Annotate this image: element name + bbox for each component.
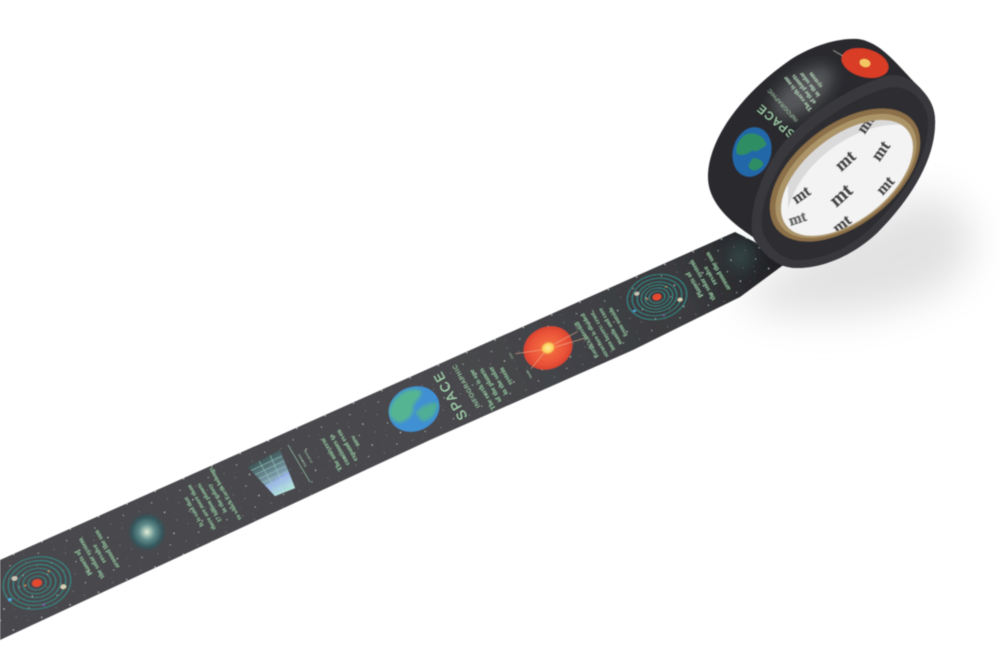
face inner band (762, 87, 928, 260)
icon: earth core cross-section: Crust (573, 322, 580, 331)
text: planets of the solar system, left: Planets of (74, 548, 94, 576)
title: SPACE infographic: INFOGRAPHIC (451, 363, 482, 409)
text: planets of the solar system, right: around the sun (704, 250, 732, 291)
mt logos (788, 120, 900, 232)
icon: right solar system (623, 269, 691, 325)
text: billions of planets: It is said that (184, 495, 206, 528)
roll silhouette wall (708, 39, 935, 268)
icon: galaxy (127, 512, 167, 552)
text: planets of the solar system, right: Planets of (685, 270, 705, 298)
mt logos: mt (787, 209, 809, 230)
mt logos: mt (789, 183, 814, 208)
text: billions of planets: 17 billion planets (196, 482, 224, 523)
white inner hole (760, 97, 934, 259)
text: planets of the solar system, right: revolve (702, 265, 719, 286)
roll title: SPACE: INFOGRAPHIC (767, 87, 800, 123)
icon: earth (388, 386, 440, 433)
text: the universe continues to expand: continues to (328, 433, 351, 466)
tape roll (708, 39, 944, 268)
icon: earth core cross-section: Mantle (525, 369, 533, 379)
roll shadow (735, 195, 972, 316)
text: billions of planets: in the galaxy (207, 482, 229, 514)
roll face (752, 75, 935, 268)
text: the earth is one of the planets: in the solar (488, 365, 510, 396)
star speckle (0, 232, 790, 640)
text: earth's internal: into layers: crust, (589, 309, 617, 351)
tape strip (0, 232, 790, 640)
roll text: system (807, 70, 824, 89)
text: billions of planets: to which Earth belongs (208, 466, 243, 521)
icon: earth core cross-section: Outer core (585, 335, 596, 350)
mt logos: mt (825, 179, 857, 212)
text: the universe continues to expand: expand even (335, 428, 359, 462)
text: the universe continues to expand: now (349, 434, 361, 448)
mt logos: mt (830, 146, 859, 175)
text: the earth is one of the planets: of the planets (478, 366, 503, 403)
icon: expanding universe cup (248, 450, 295, 497)
text: planets of the solar system, left: the solar system (77, 536, 106, 579)
roll earth (727, 123, 777, 181)
roll title: SPACE (755, 87, 800, 140)
diagram axis with small labels: Expansion (297, 453, 307, 468)
icon: earth core cross-section: Core (507, 352, 514, 360)
roll text: of the planets (790, 73, 818, 105)
text: earth's internal: from outside (608, 306, 629, 337)
mt logos: mt (854, 111, 879, 137)
text: planets of the solar system, left: revolve (91, 543, 108, 564)
diagram axis with small labels: of universe (303, 449, 314, 464)
roll sun (829, 41, 892, 83)
roll text: The earth is one (782, 75, 814, 113)
text: billions of planets: there are more than (187, 483, 218, 531)
roll text: in the solar (798, 70, 822, 98)
mt logos: mt (867, 137, 894, 164)
text: earth's internal: Earth's internal (575, 320, 600, 359)
text: planets of the solar system, left: around the sun (93, 528, 121, 569)
icon: faint galaxy near roll (728, 242, 754, 270)
title: SPACE infographic: SPACE (430, 368, 470, 423)
text: earth's internal: structure is divided (580, 311, 610, 358)
mt logos: mt (873, 173, 899, 199)
diagram axis with small labels (288, 445, 314, 482)
icon: left solar system (0, 551, 76, 615)
text: the earth is one of the planets: system (498, 366, 514, 386)
text: earth's internal: mantle and core (598, 306, 624, 345)
icon: earth core cross-section (504, 311, 596, 383)
tape body (0, 232, 790, 640)
cardboard core (746, 82, 944, 268)
mt logos: mt (830, 212, 855, 237)
text: planets of the solar system, right: the solar system (688, 258, 717, 301)
text: the earth is one of the planets: The earth is one (468, 368, 498, 411)
text: the universe continues to expand: The universe (320, 436, 344, 472)
roll title: SPACE: SPACE (755, 101, 798, 140)
highlight on roll wall (764, 56, 842, 128)
